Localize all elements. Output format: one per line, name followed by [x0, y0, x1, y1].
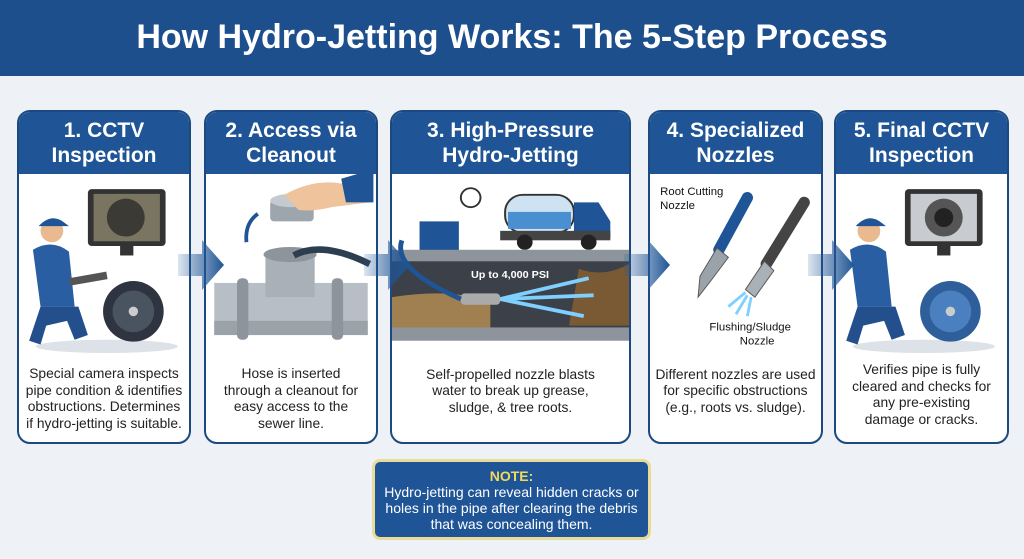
heading: step 3 — [392, 112, 629, 174]
text: step 5: Verifies pipe is fully cleared and checks for any pre-existing damage or cracks. — [852, 362, 991, 426]
arrow 4 — [808, 240, 854, 290]
heading: step 1: Inspection — [51, 144, 156, 167]
panel: step 5 — [834, 110, 1009, 444]
icon: technician with clean pipe monitor — [846, 189, 995, 353]
panel: step 4 — [648, 110, 823, 444]
heading: step 4: Nozzles — [696, 144, 775, 167]
heading: step 2: 2. Access via — [225, 119, 357, 142]
callout: note: Hydro-jetting can reveal hidden cracks or holes in the pipe after clearing the debris that was concealing them. — [384, 484, 639, 532]
heading: step 1 — [19, 112, 189, 174]
icon: nozzles: Flushing/Sludge — [709, 321, 791, 333]
heading: step 4 — [650, 112, 821, 174]
heading: step 1: 1. CCTV — [64, 119, 144, 142]
panel: step 1 — [17, 110, 191, 444]
heading: step 4: 4. Specialized — [667, 119, 804, 142]
heading: step 2: Cleanout — [246, 144, 336, 167]
heading: step 5: Inspection — [869, 144, 974, 167]
text: step 3: Self-propelled nozzle blasts water to break up grease, sludge, & tree roots. — [426, 366, 595, 414]
heading: step 3: Hydro-Jetting — [442, 144, 579, 167]
arrow 3 — [624, 240, 670, 290]
panel: step 3 — [390, 110, 631, 444]
heading: step 3: 3. High-Pressure — [427, 119, 594, 142]
icon: jetter truck and pipe: Up to 4,000 PSI — [471, 269, 549, 281]
icon: jetter truck and pipe — [392, 187, 629, 341]
icon: nozzles — [660, 186, 810, 348]
title: How Hydro-Jetting Works: The 5-Step Process — [136, 18, 888, 56]
heading: step 5 — [836, 112, 1007, 174]
arrow 2 — [364, 240, 408, 290]
icon: cleanout pipe and hand — [214, 174, 374, 340]
text: step 2: Hose is inserted through a cleanout for easy access to the sewer line. — [224, 366, 358, 430]
callout: note — [372, 459, 651, 540]
text: step 4: Different nozzles are used for specific obstructions (e.g., roots vs. sludge). — [655, 366, 816, 414]
icon: nozzles: Nozzle — [660, 200, 695, 212]
heading: step 2 — [206, 112, 376, 174]
icon: technician with monitor and reel — [29, 189, 178, 353]
title — [0, 0, 1024, 76]
arrow 1 — [178, 240, 224, 290]
panel: step 2 — [204, 110, 378, 444]
callout: note: NOTE: — [490, 468, 533, 484]
icon: nozzles: Nozzle — [740, 336, 774, 348]
heading: step 5: 5. Final CCTV — [854, 119, 989, 142]
text: step 1: Special camera inspects pipe condition & identifies obstructions. Determines if hydro-jetting is suitable. — [26, 366, 182, 430]
icon: nozzles: Root Cutting — [660, 186, 723, 198]
